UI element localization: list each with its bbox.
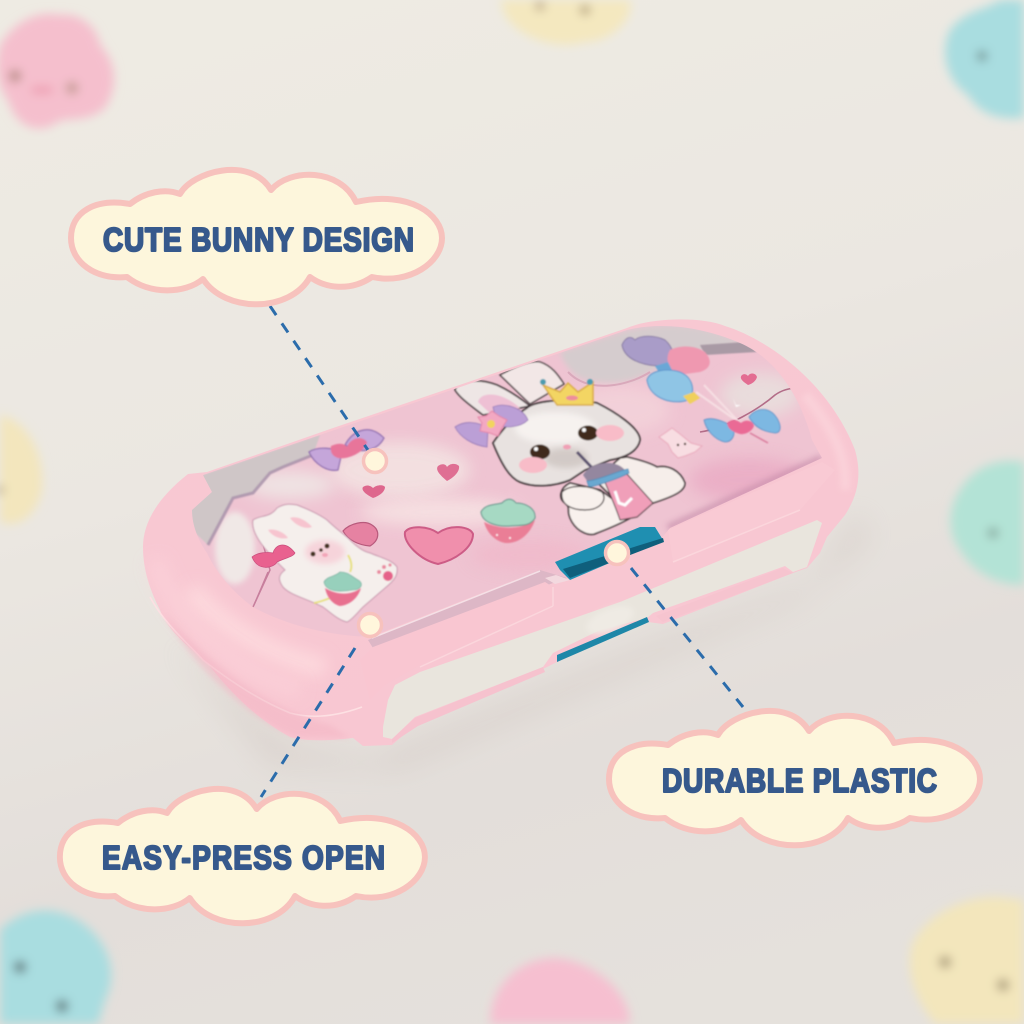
lid artwork panel xyxy=(192,326,822,637)
big bunny xyxy=(455,362,685,534)
crown xyxy=(543,382,593,405)
tab bottom lines xyxy=(420,510,800,667)
head light xyxy=(515,412,595,444)
decorative blurred yellow bear bottom-right xyxy=(910,897,1024,1024)
balloon bouquet xyxy=(622,336,741,423)
lid groove xyxy=(368,570,567,648)
grey cloud top xyxy=(560,325,745,383)
small bear xyxy=(659,428,702,458)
bunny lower body xyxy=(561,483,635,534)
left pink tab xyxy=(360,582,553,700)
big heart xyxy=(405,527,473,564)
blush and nose xyxy=(519,457,547,473)
flower xyxy=(478,411,507,436)
cup rim xyxy=(587,469,629,487)
heart by small bunny xyxy=(343,523,378,546)
product: pink pencil box xyxy=(143,319,858,746)
small bunny xyxy=(253,504,397,622)
heart top-center xyxy=(437,464,459,481)
lid artwork xyxy=(190,325,822,622)
blue latch button xyxy=(555,527,663,580)
blue bow with heart xyxy=(704,410,780,443)
callout: cute bunny design: CUTE BUNNY DESIGN xyxy=(103,222,414,259)
right ear xyxy=(500,362,564,404)
left ear xyxy=(455,381,530,415)
pink bow xyxy=(252,545,295,567)
strawberry large xyxy=(481,499,535,543)
head xyxy=(493,400,640,486)
white latch strip xyxy=(383,520,822,739)
marker dot: bunny xyxy=(364,450,386,472)
connector line: easy-press open xyxy=(261,648,355,797)
decorative blurred pink bear top-left xyxy=(0,14,114,128)
heart small xyxy=(362,485,385,498)
decorative blurred mint bear right xyxy=(951,461,1024,585)
straw xyxy=(576,450,593,468)
latch lobe xyxy=(583,600,637,640)
body highlight left bumper xyxy=(190,590,325,668)
product shadow xyxy=(170,510,870,770)
right pink tab xyxy=(668,462,835,562)
decorative blurred teal bear bottom-left xyxy=(0,911,111,1024)
right end highlight xyxy=(805,395,845,490)
bumper seam xyxy=(150,597,362,716)
callout: easy-press open: EASY-PRESS OPEN xyxy=(102,840,385,877)
small strawberry xyxy=(324,572,361,606)
bunny right arm and leg xyxy=(598,455,687,505)
decorative blurred yellow bear top xyxy=(500,0,631,45)
callout: durable plastic: DURABLE PLASTIC xyxy=(662,763,937,800)
eyes xyxy=(530,444,550,460)
callout: cute bunny design xyxy=(71,170,442,304)
arm xyxy=(562,486,604,510)
marker dot: button xyxy=(606,542,628,564)
cup dome xyxy=(582,462,625,482)
cup xyxy=(605,474,653,520)
decorative blurred teal bear top-right xyxy=(945,0,1024,118)
pink lower strips xyxy=(392,667,545,743)
mottled light patches xyxy=(330,442,470,498)
box body xyxy=(143,319,858,746)
grey cloud corner left xyxy=(190,435,320,545)
top bow xyxy=(309,430,384,470)
blue inner strip xyxy=(557,617,649,662)
lid front shadow band xyxy=(668,458,822,528)
purple bow xyxy=(455,423,488,447)
connector line: cute bunny design xyxy=(270,306,372,456)
right heart xyxy=(741,373,757,385)
body lower shade xyxy=(163,612,350,738)
connector line: durable plastic xyxy=(631,568,743,707)
callout: durable plastic xyxy=(609,711,980,845)
decorative blurred pink bear bottom xyxy=(490,958,630,1024)
callout: easy-press open xyxy=(60,789,425,923)
paw xyxy=(383,571,393,581)
decorative blurred yellow bear left xyxy=(0,415,42,524)
lid right curve line xyxy=(700,388,798,432)
marker dot: easy press xyxy=(358,614,382,636)
yellow ring xyxy=(314,555,351,603)
